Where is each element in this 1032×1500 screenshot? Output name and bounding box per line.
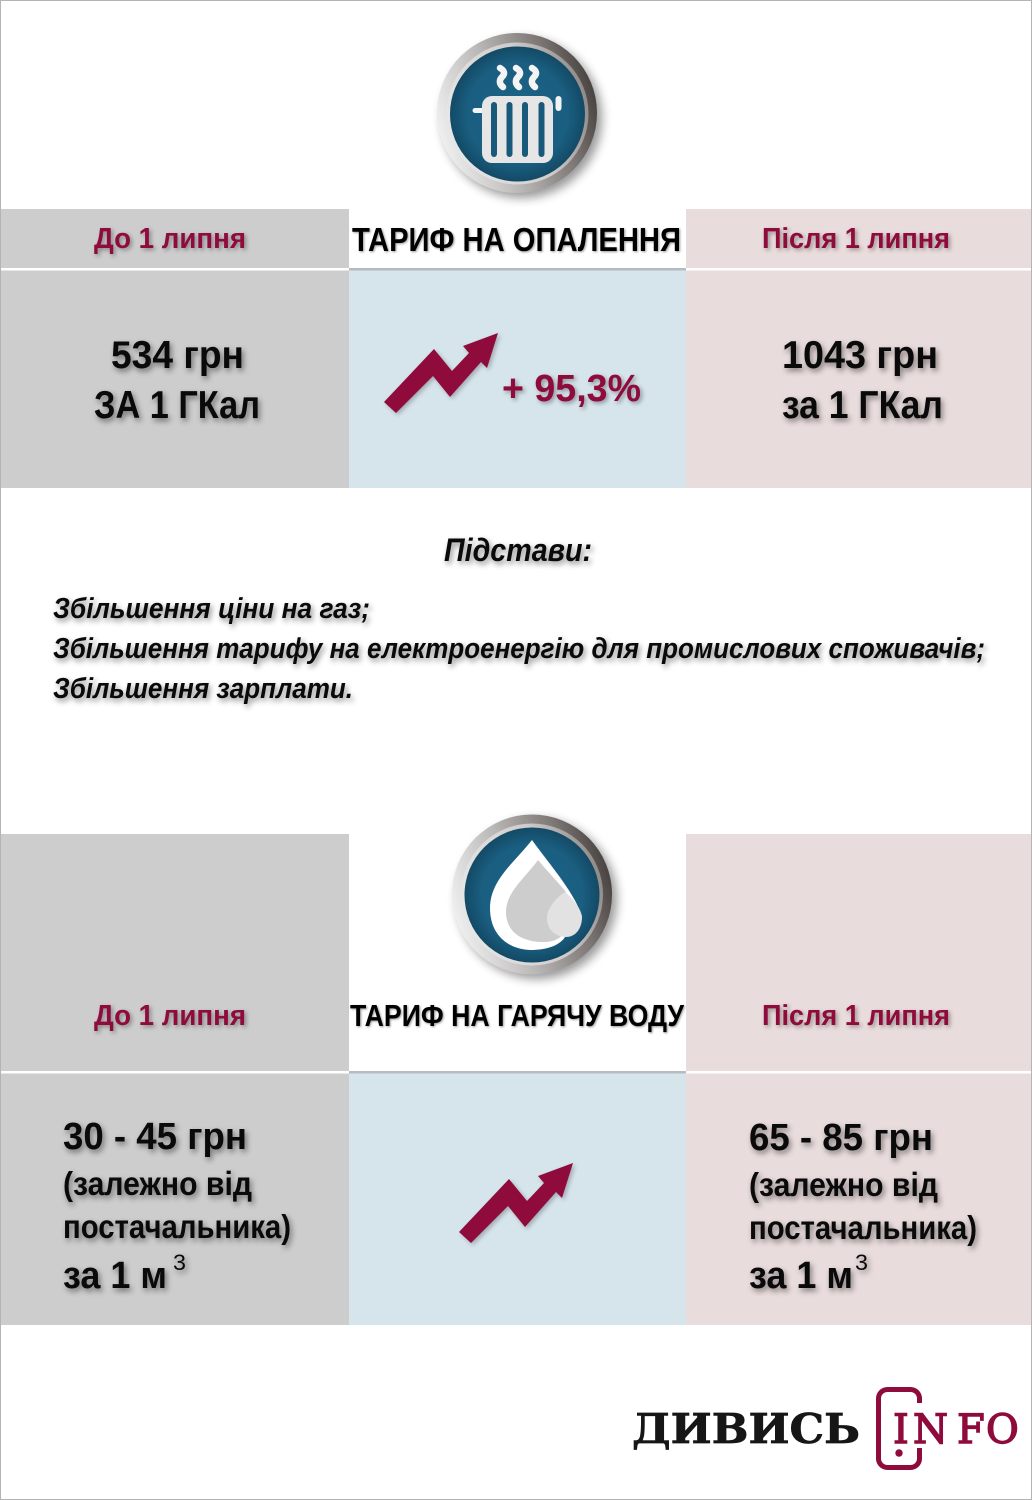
panel: water price after: постачальника) (749, 1209, 977, 1246)
reason: gas price: Збільшення ціни на газ; (53, 593, 370, 625)
panel: water price after: 3 (855, 1250, 868, 1275)
panel: water price after: (залежно від (749, 1166, 938, 1203)
section: reasons (53, 532, 985, 705)
heading: reasons: Підстави: (444, 532, 592, 568)
panel: heating after header: Після 1 липня (762, 223, 950, 255)
panel: water price before: за 1 м (63, 1255, 167, 1297)
panel: water price before: 3 (173, 1250, 186, 1275)
panel: water after header: Після 1 липня (762, 1000, 950, 1032)
panel: heating price after (686, 270, 1032, 488)
increase percentage: + 95,3% (502, 368, 641, 410)
panel: heating before header (0, 209, 349, 268)
icon: rising arrow (384, 333, 498, 413)
panel: heating price before: 534 грн (111, 334, 244, 377)
reason: salaries: Збільшення зарплати. (53, 673, 353, 705)
panel: heating increase (349, 270, 686, 488)
panel: heating title (349, 209, 686, 268)
panel: heating tariff table (0, 209, 1032, 488)
panel: water price after (686, 1074, 1032, 1325)
panel: water before header: До 1 липня (94, 1000, 246, 1032)
logo wordmark: ДИВИСЬ: ДИВИСЬ (632, 1405, 860, 1453)
panel: water price after: 65 - 85 грн (749, 1117, 933, 1159)
panel: heating price after: за 1 ГКал (782, 384, 943, 427)
panel: heating before header: До 1 липня (94, 223, 246, 255)
panel: water price before: 30 - 45 грн (63, 1116, 247, 1158)
panel: water increase (349, 1074, 686, 1325)
logo wordmark: INFO: INFO (893, 1407, 1019, 1453)
panel: heating price before (0, 270, 349, 488)
logo icon: phone outline (878, 1390, 925, 1468)
icon: radiator badge (437, 33, 602, 198)
panel: heating title: ТАРИФ НА ОПАЛЕННЯ (352, 221, 681, 258)
panel: hot water tariff table (0, 834, 1032, 1325)
panel: heating price before: ЗА 1 ГКал (94, 384, 260, 427)
logo: Дивись Info (632, 1390, 1019, 1468)
icon: rising arrow (459, 1163, 573, 1243)
panel: water price before: постачальника) (63, 1208, 291, 1245)
panel: water before header (0, 834, 349, 1071)
panel: heating price after: 1043 грн (782, 334, 938, 377)
panel: water price before (0, 1074, 349, 1325)
panel: heating after header (686, 209, 1032, 268)
panel: water title (349, 834, 686, 1071)
icon: water drop badge (452, 814, 617, 979)
panel: water title: ТАРИФ НА ГАРЯЧУ ВОДУ (350, 998, 685, 1033)
panel: water price before: (залежно від (63, 1165, 252, 1202)
panel: water price after: за 1 м (749, 1255, 853, 1297)
panel: water after header (686, 834, 1032, 1071)
